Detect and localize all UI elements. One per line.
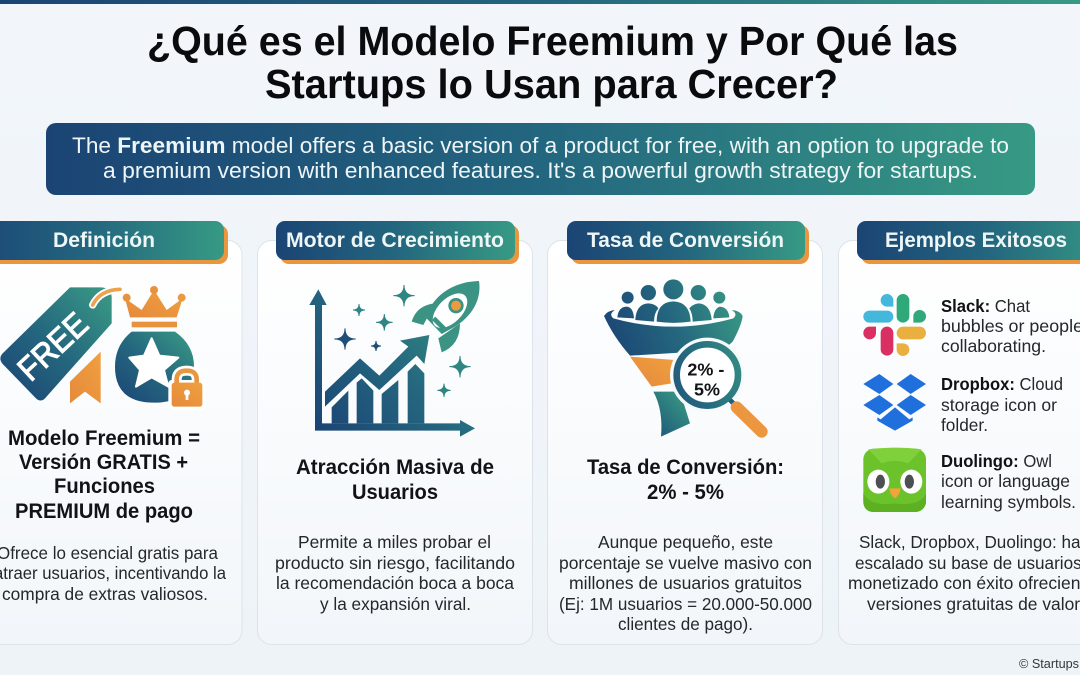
header: tasa de conversión — [567, 221, 809, 264]
header: ejemplos exitosos: Ejemplos Exitosos — [885, 229, 1067, 252]
header: motor de crecimiento: Motor de Crecimiento — [286, 229, 504, 252]
body text: definición — [0, 543, 226, 604]
icon: conversion funnel with magnifier: 5% — [694, 379, 720, 399]
subheading: definición — [8, 427, 200, 523]
header: tasa de conversión: Tasa de Conversión — [587, 229, 784, 252]
panel: tasa de conversión — [548, 221, 822, 644]
subheading: definición: PREMIUM de pago — [15, 500, 193, 523]
text: dropbox line 2: storage icon or — [941, 395, 1057, 415]
body text: motor de crecimiento — [275, 532, 515, 614]
body text: tasa de conversión: porcentaje se vuelve masivo con — [559, 553, 812, 573]
panel: definición — [0, 221, 242, 644]
text: slack line 2: bubbles or people — [941, 316, 1080, 336]
body text: ejemplos exitosos: versiones gratuitas de valor. — [867, 594, 1080, 614]
text: duolingo line 3: learning symbols. — [941, 492, 1076, 512]
body text: motor de crecimiento: la recomendación boca a boca — [276, 573, 514, 593]
title: ¿Qué es el Modelo Freemium y Por Qué las — [147, 18, 958, 64]
icon: growth chart and rocket — [309, 281, 479, 437]
subheading: motor de crecimiento — [296, 456, 494, 504]
intro banner — [46, 123, 1035, 195]
subheading: tasa de conversión: Tasa de Conversión: — [587, 456, 784, 479]
subheading: tasa de conversión: 2% - 5% — [647, 481, 724, 504]
body text: definición: compra de extras valiosos. — [2, 584, 208, 604]
icon: duolingo logo — [863, 448, 926, 512]
subheading: tasa de conversión — [587, 456, 784, 504]
icon: dropbox logo — [863, 374, 926, 431]
body text: motor de crecimiento: Permite a miles probar el — [298, 532, 491, 552]
icon: conversion funnel with magnifier — [604, 279, 762, 437]
body text: tasa de conversión: (Ej: 1M usuarios = 20.000-50.000 — [559, 594, 812, 614]
body text: tasa de conversión: Aunque pequeño, este — [598, 532, 773, 552]
subheading: motor de crecimiento: Usuarios — [352, 481, 438, 504]
text: duolingo line 2: icon or language — [941, 471, 1070, 491]
text: dropbox line 3: folder. — [941, 415, 988, 435]
title: Startups lo Usan para Crecer? — [265, 61, 838, 107]
icon: conversion funnel with magnifier: 2% - — [687, 360, 724, 380]
icon: free tag and premium bag: FREE — [11, 306, 96, 389]
intro banner: The Freemium model offers a basic version of a product for free, with an option to upgrade to — [72, 133, 1009, 158]
text: slack line 3: collaborating. — [941, 336, 1046, 356]
top accent bar — [0, 0, 1080, 4]
body text: motor de crecimiento: y la expansión viral. — [320, 594, 471, 614]
panel: motor de crecimiento — [258, 221, 532, 644]
text: duolingo: Duolingo: Owl — [941, 451, 1052, 471]
header: ejemplos exitosos — [857, 221, 1080, 264]
body text: definición: atraer usuarios, incentivando la — [0, 563, 226, 583]
subheading: motor de crecimiento: Atracción Masiva de — [296, 456, 494, 479]
text: slack: Slack: Chat — [941, 296, 1030, 316]
title — [147, 18, 958, 107]
subheading: definición: Modelo Freemium = — [8, 427, 200, 450]
text: dropbox: Dropbox: Cloud — [941, 374, 1063, 394]
header: definición: Definición — [53, 229, 155, 252]
footer credit: © Startups — [1019, 656, 1079, 671]
subheading: definición: Funciones — [54, 475, 155, 498]
body text: tasa de conversión: clientes de pago). — [618, 614, 753, 634]
subheading: definición: Versión GRATIS + — [19, 451, 188, 474]
header: definición — [0, 221, 228, 264]
icon: slack logo — [863, 294, 926, 356]
icon: free tag and premium bag — [0, 286, 206, 410]
header: motor de crecimiento — [276, 221, 519, 264]
panel: ejemplos exitosos — [838, 221, 1080, 644]
body text: definición: Ofrece lo esencial gratis para — [0, 543, 218, 563]
body text: motor de crecimiento: producto sin riesgo, facilitando — [275, 553, 515, 573]
body text: tasa de conversión: millones de usuarios gratuitos — [569, 573, 802, 593]
intro banner: a premium version with enhanced features. It's a powerful growth strategy for startups. — [103, 158, 978, 183]
body text: tasa de conversión — [559, 532, 812, 634]
body text: ejemplos exitosos — [848, 532, 1080, 614]
